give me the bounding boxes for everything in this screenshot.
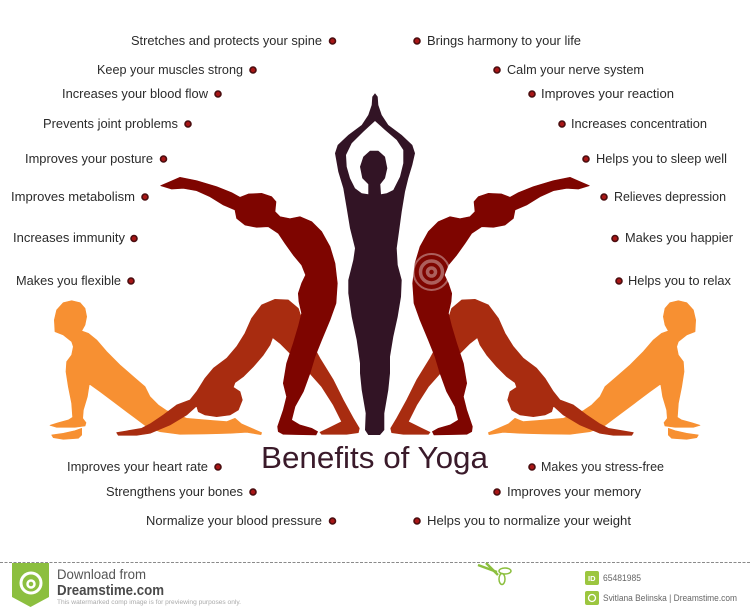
right benefit labels: Helps you to relax (628, 274, 732, 288)
bottom left benefit labels: Strengthens your bones (106, 485, 243, 499)
id number: 65481985 (603, 573, 641, 584)
disclaimer: This watermarked comp image is for previewing purposes only. (57, 599, 241, 606)
bottom right benefit labels (414, 460, 664, 528)
dreamstime brand: Dreamstime.com (57, 582, 164, 599)
bottom left benefit labels: Improves your heart rate (67, 460, 208, 474)
right yoga figures (391, 177, 700, 439)
watermark spiral (414, 254, 450, 290)
bottom right benefit labels: Improves your memory (507, 485, 642, 499)
icon: id badge: ID (588, 574, 596, 583)
right benefit labels: Relieves depression (614, 190, 726, 204)
left benefit labels: Keep your muscles strong (97, 63, 243, 77)
right benefit labels: Calm your nerve system (507, 63, 644, 77)
left benefit labels: Improves metabolism (11, 190, 135, 204)
left yoga figures (50, 177, 359, 439)
download text: Download from (57, 567, 146, 582)
icon: author badge (585, 591, 599, 605)
left benefit labels: Increases immunity (13, 231, 126, 245)
title: Benefits of Yoga (261, 440, 489, 475)
right benefit labels: Makes you happier (625, 231, 733, 245)
footer band (0, 562, 750, 607)
bottom right benefit labels: Makes you stress-free (541, 460, 664, 474)
bottom left benefit labels: Normalize your blood pressure (146, 514, 322, 528)
icon: id badge (585, 571, 599, 585)
bottom right benefit labels: Helps you to normalize your weight (427, 514, 632, 528)
left benefit labels: Makes you flexible (16, 274, 121, 288)
right benefit labels: Improves your reaction (541, 87, 674, 101)
left benefit labels (11, 34, 336, 288)
left benefit labels: Prevents joint problems (43, 117, 178, 131)
right benefit labels: Increases concentration (571, 117, 707, 131)
central standing figure (335, 93, 415, 435)
bottom left benefit labels (67, 460, 336, 528)
right benefit labels (414, 34, 733, 288)
left benefit labels: Improves your posture (25, 152, 153, 166)
left benefit labels: Stretches and protects your spine (131, 34, 322, 48)
right benefit labels: Helps you to sleep well (596, 152, 727, 166)
icon: dreamstime pennant (12, 563, 49, 607)
icon: scissors (478, 563, 511, 584)
right benefit labels: Brings harmony to your life (427, 34, 581, 48)
left benefit labels: Increases your blood flow (62, 87, 209, 101)
